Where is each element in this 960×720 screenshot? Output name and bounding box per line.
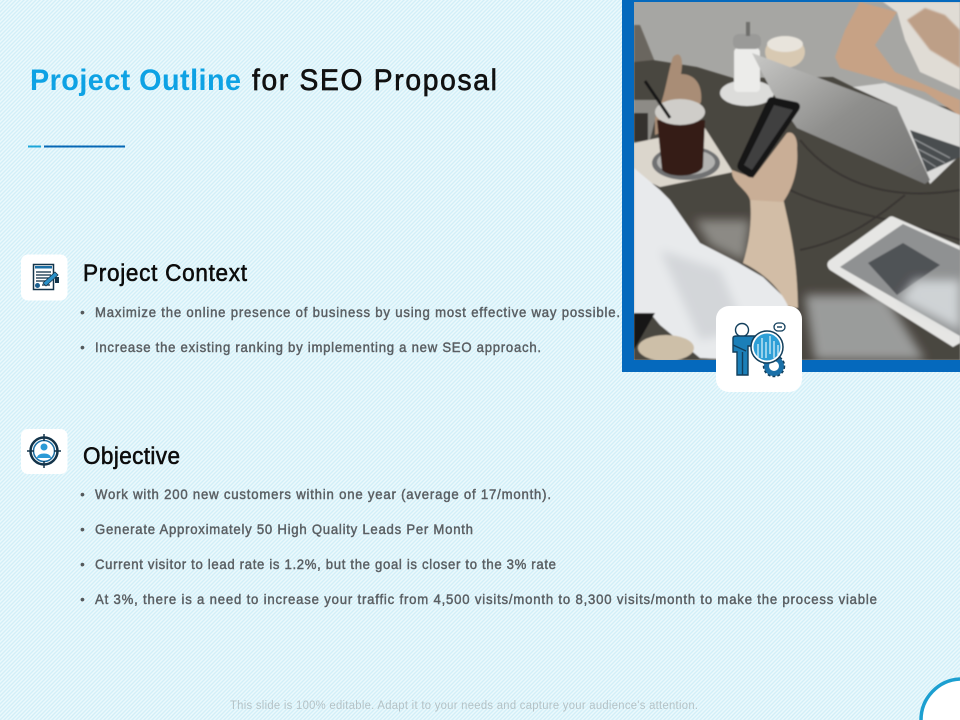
bullets: objective: • (80, 556, 85, 572)
bullets: project context (80, 304, 620, 355)
hand holding phone (732, 132, 797, 202)
lower left shadow and crumbs (634, 313, 655, 350)
title: Project Outline (30, 63, 241, 97)
bullets: objective: • (80, 521, 85, 537)
bullets: objective: Generate Approximately 50 High Quality Leads Per Month (95, 522, 473, 537)
photo: cafe table with phone, laptop and tablet (634, 2, 960, 361)
title (30, 63, 497, 97)
bullets: project context: Increase the existing ranking by implementing a new SEO approach. (95, 340, 541, 355)
left fist (655, 54, 701, 135)
laptop lid (752, 53, 930, 184)
large icon card: analyst with chart magnifier (716, 306, 802, 392)
laptop keyboard base (853, 83, 960, 184)
bullets: project context: Maximize the online presence of business by using most effective way possible. (95, 305, 620, 320)
icon card: project context document (21, 254, 68, 300)
bullets: objective: • (80, 591, 85, 607)
photo frame (622, 0, 960, 372)
title underline (28, 146, 125, 148)
coaster and saucer (634, 128, 733, 187)
icon card: objective target (21, 429, 68, 474)
wood grain (790, 140, 960, 250)
speech bubble (774, 323, 785, 331)
bullets: objective (80, 486, 877, 607)
magnifier with bars (751, 331, 783, 363)
tablet (827, 216, 960, 347)
heading: objective: Objective (83, 442, 180, 469)
bullets: objective: Work with 200 new customers within one year (average of 17/month). (95, 487, 551, 502)
bullets: objective: At 3%, there is a need to increase your traffic from 4,500 visits/month to 8,300 visits/month to make the process viable (95, 592, 877, 607)
bullets: objective: • (80, 486, 85, 502)
light wood patches (695, 220, 750, 262)
heading: project context: Project Context (83, 259, 248, 286)
footer note: This slide is 100% editable. Adapt it to your needs and capture your audience's attention. (230, 699, 698, 712)
forearm (743, 198, 798, 308)
table surface (634, 60, 960, 360)
title: for SEO Proposal (252, 64, 497, 97)
sugar dispenser saucer and cup (720, 80, 774, 106)
bullets: objective: Current visitor to lead rate is 1.2%, but the goal is closer to the 3% rate (95, 557, 556, 572)
iced coffee glass (657, 120, 705, 176)
phone (737, 97, 800, 177)
white shirt (634, 168, 790, 360)
person arm top right (835, 2, 960, 116)
dark band at left (634, 25, 655, 62)
corner circle (921, 679, 960, 720)
bullets: project context: • (80, 339, 85, 355)
gear (764, 356, 784, 376)
bullets: project context: • (80, 304, 85, 320)
person (733, 324, 757, 375)
